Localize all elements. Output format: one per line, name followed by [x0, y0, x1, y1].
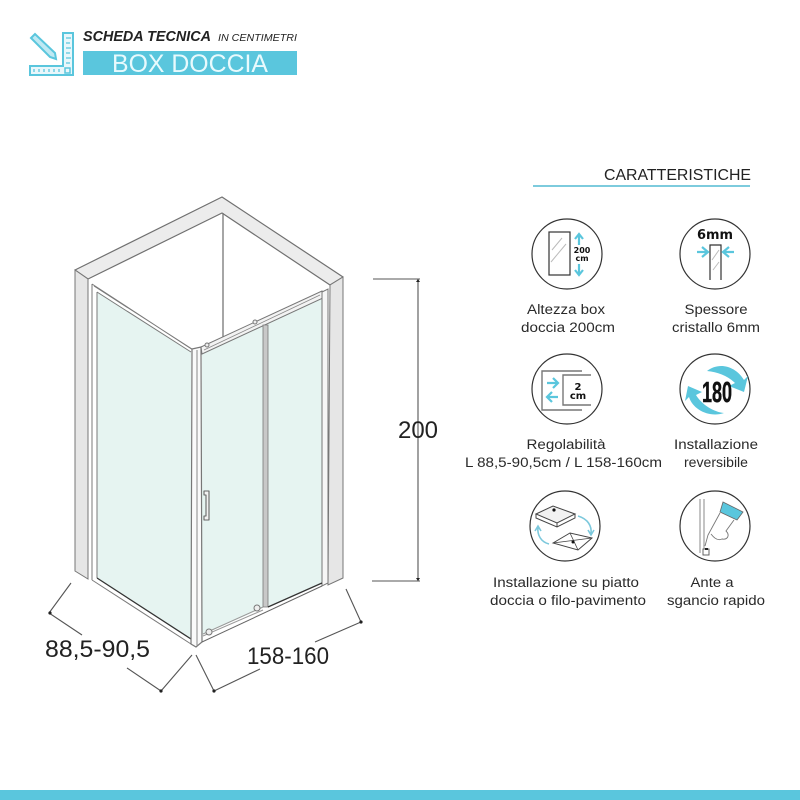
wall: corner line: [222, 213, 224, 337]
feature: regolabilita: [465, 354, 662, 470]
feature: spessore cristallo: [672, 219, 760, 335]
dimension: height 200: 200: [398, 417, 438, 444]
frame: central mullion: [263, 325, 268, 607]
frame: central post: [191, 347, 202, 647]
label: doccia o filo-pavimento: [490, 593, 646, 608]
frame: bottom track: [202, 583, 322, 642]
icon: pencil and set square: [30, 33, 73, 75]
feature: installazione reversibile: [674, 354, 758, 470]
subheading: in centimetri: IN CENTIMETRI: [218, 33, 297, 44]
glass: left panel: [97, 292, 191, 639]
label: Installazione su piatto: [493, 575, 639, 590]
icon: glass thickness 6mm: 6mm: [697, 228, 733, 243]
icon: adjustable 2 cm: cm: [570, 391, 586, 402]
heading: caratteristiche: CARATTERISTICHE: [604, 167, 751, 184]
icon: height 200 cm: 200: [574, 246, 591, 255]
feature: installazione su piatto: [490, 491, 646, 608]
label: Spessore: [684, 302, 748, 317]
dimension: depth 88,5-90,5: [45, 583, 192, 693]
label: sgancio rapido: [667, 593, 765, 608]
icon: adjustable 2 cm: [532, 354, 602, 424]
shower box technical drawing: [75, 197, 343, 647]
label: Ante a: [690, 575, 734, 590]
label: [465, 437, 662, 470]
feature: altezza box: [521, 219, 615, 335]
wall: left: [75, 270, 88, 579]
label: Regolabilità: [526, 437, 606, 452]
dimension: width 158-160: 158-160: [247, 643, 329, 670]
label: [521, 302, 615, 335]
door handle: [204, 491, 209, 520]
icon: hand releasing door: [680, 491, 750, 561]
dimension: depth 88,5-90,5: 88,5-90,5: [45, 636, 150, 663]
wall: right: [328, 277, 343, 585]
door rollers: [205, 320, 260, 635]
frame: left panel profile: [92, 284, 193, 644]
label: L 88,5-90,5cm / L 158-160cm: [465, 455, 662, 470]
frame: top rail: [201, 291, 323, 354]
label: cristallo 6mm: [672, 320, 760, 335]
heading: scheda tecnica: SCHEDA TECNICA: [83, 29, 211, 45]
title banner: box doccia: BOX DOCCIA: [112, 50, 268, 78]
glass: sliding door: [202, 325, 263, 635]
bottom colour band: [0, 790, 800, 800]
icon: tray or floor level: [530, 491, 600, 561]
label: [490, 575, 646, 608]
icon: 180 rotation: 180: [702, 377, 732, 409]
wall: top outline: [75, 197, 343, 285]
label: [674, 437, 758, 470]
icon: height 200 cm: [532, 219, 602, 289]
feature: ante a sgancio rapido: [667, 491, 765, 608]
header: [30, 29, 297, 78]
frame: right jamb: [322, 289, 328, 586]
icon: height 200 cm: cm: [575, 254, 589, 263]
dimension: width 158-160: [196, 589, 363, 693]
glass: fixed panel: [268, 297, 322, 607]
dimension: height 200: [372, 279, 438, 581]
label: doccia 200cm: [521, 320, 615, 335]
label: reversibile: [684, 455, 748, 470]
label: Installazione: [674, 437, 758, 452]
icon: adjustable 2 cm: 2: [575, 382, 582, 393]
label: [672, 302, 760, 335]
label: [667, 575, 765, 608]
label: Altezza box: [527, 302, 605, 317]
